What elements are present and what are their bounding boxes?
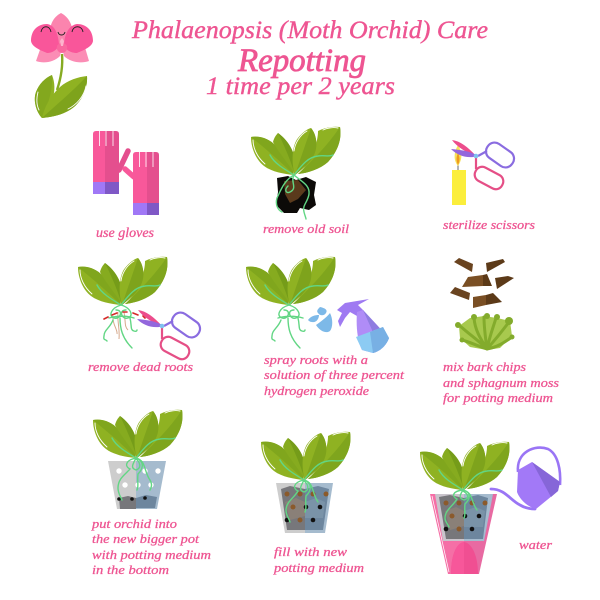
step: remove dead roots	[78, 257, 203, 374]
label: use gloves	[96, 225, 154, 240]
label: solution of three percent	[264, 367, 404, 382]
label: put orchid into	[91, 516, 178, 531]
icon: filled pot	[261, 432, 350, 533]
icon: left glove	[93, 131, 128, 194]
label: potting medium	[273, 560, 364, 575]
title: repotting: Repotting	[237, 43, 366, 79]
label	[91, 516, 211, 577]
label	[443, 359, 559, 405]
label: remove old soil	[263, 221, 349, 236]
icon: bark chips	[450, 258, 514, 308]
label	[273, 544, 364, 575]
step: put orchid into pot	[91, 410, 211, 577]
icon: scissors	[451, 139, 517, 192]
label	[264, 352, 404, 398]
label: remove dead roots	[88, 359, 193, 374]
step: remove old soil	[251, 127, 349, 236]
step: water	[420, 442, 560, 574]
icon: candle	[452, 145, 466, 205]
label: spray roots with a	[264, 352, 369, 367]
label: and sphagnum moss	[443, 375, 559, 390]
icon: spray bottle	[337, 299, 389, 353]
icon: sphagnum moss	[455, 313, 514, 350]
label: with potting medium	[92, 547, 211, 562]
step: sterilize scissors	[443, 139, 535, 232]
icon: plant with soil clump	[251, 127, 340, 219]
label: in the bottom	[92, 562, 169, 577]
icon: pink pot with orchid	[420, 442, 510, 574]
step: fill with medium	[261, 432, 364, 575]
title: care heading: Phalaenopsis (Moth Orchid) Care	[131, 17, 488, 44]
mascot: smiling orchid flower	[31, 13, 93, 118]
icon: watering can	[491, 448, 560, 509]
label: mix bark chips	[443, 359, 526, 374]
subtitle: frequency: 1 time per 2 years	[206, 73, 395, 100]
icon: plant with roots	[78, 257, 168, 348]
icon: right glove	[125, 152, 159, 215]
label: the new bigger pot	[92, 531, 199, 546]
icon: scissors	[137, 309, 203, 362]
label: water	[519, 537, 553, 552]
icon: clear pot with orchid	[93, 410, 182, 509]
icon: plant with roots	[246, 257, 336, 348]
label: for potting medium	[443, 390, 553, 405]
label: hydrogen peroxide	[264, 383, 369, 398]
step: potting medium	[443, 258, 559, 405]
icon: water drops	[308, 307, 332, 332]
step: use gloves	[93, 131, 159, 240]
label: fill with new	[274, 544, 347, 559]
step: spray roots	[246, 257, 404, 398]
label: sterilize scissors	[443, 217, 535, 232]
